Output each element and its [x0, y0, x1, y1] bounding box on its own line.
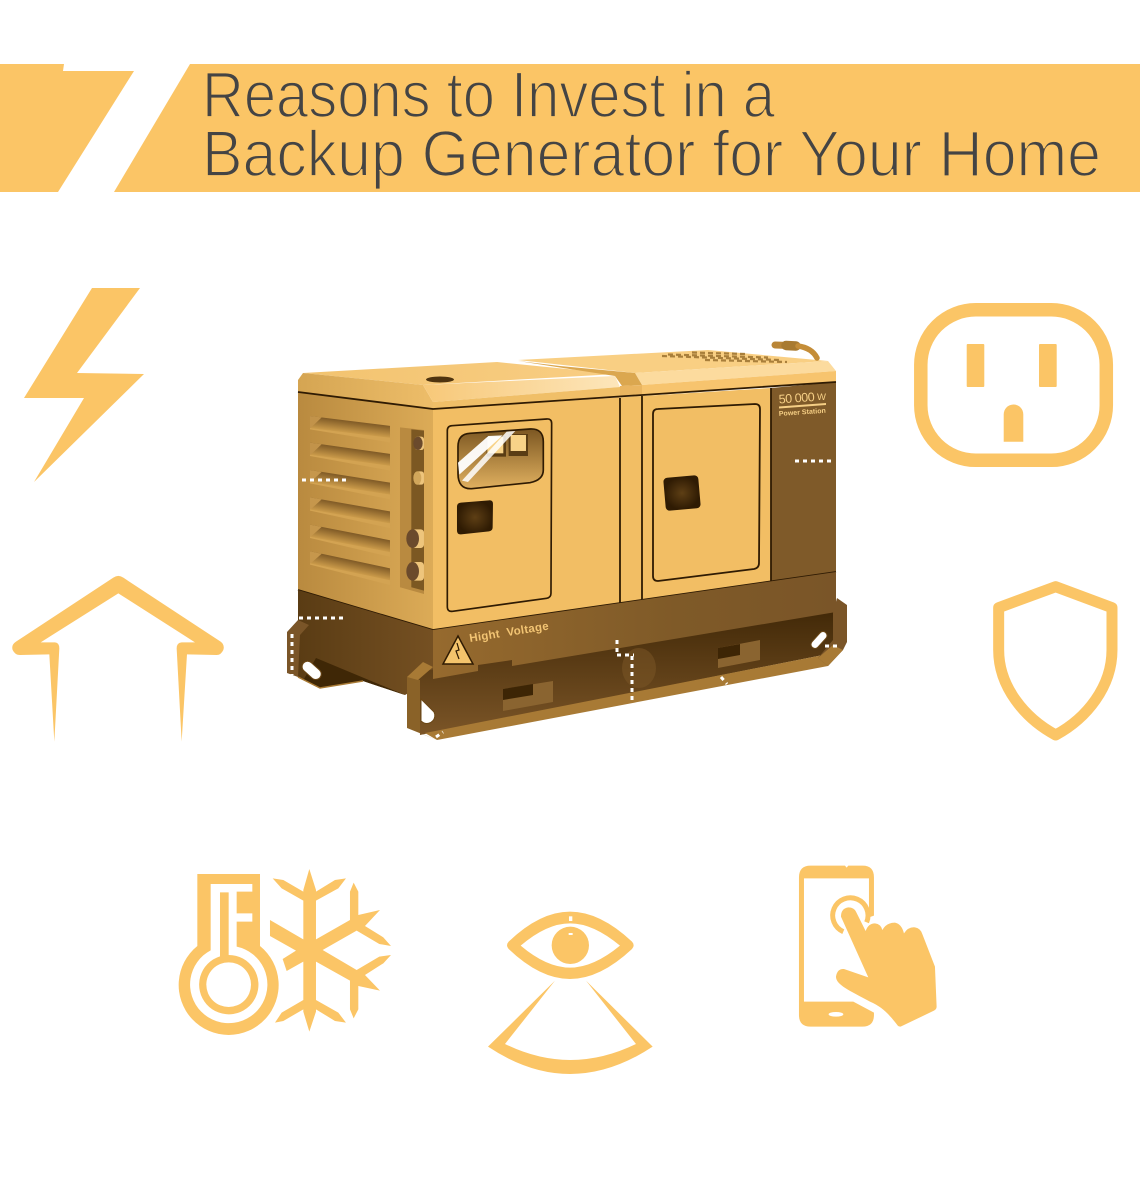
roof vent holes: [662, 352, 787, 362]
banner left slash: [0, 64, 134, 192]
generator roof: [298, 350, 836, 409]
title banner: [0, 58, 1140, 192]
warning triangle: [443, 636, 473, 664]
mounting holes: [300, 630, 829, 724]
end panel labels: Power Station: [779, 408, 826, 418]
skid beam: [425, 655, 828, 740]
high voltage label: Hight Voltage: [469, 621, 549, 645]
touch ring: [833, 898, 868, 932]
panel outlines: [298, 382, 836, 630]
dotted white seams: [292, 461, 838, 737]
window gauges: [487, 436, 506, 457]
door screen: [457, 500, 493, 534]
generator illustration: [287, 345, 847, 740]
phone: [799, 866, 874, 1027]
thermometer: [179, 874, 279, 1035]
end panel labels: W: [817, 392, 826, 403]
icon: lightning bolt: [24, 288, 144, 482]
hand: [836, 907, 937, 1027]
control window: [458, 429, 543, 489]
generator dark end panel: [771, 382, 836, 581]
exhaust pipe: [775, 345, 817, 358]
generator front panel: [433, 388, 771, 630]
title text: Backup Generator for Your Home: [202, 117, 1101, 190]
window glare: [458, 431, 515, 482]
title text: [202, 58, 1101, 190]
banner main strip: [114, 64, 1140, 192]
right door: [653, 404, 760, 581]
icon: house: [12, 576, 224, 742]
louvers: [310, 416, 552, 611]
left bracket: [287, 620, 363, 688]
title text: Reasons to Invest in a: [202, 58, 776, 131]
recess slots: [503, 640, 760, 711]
right bracket: [818, 598, 847, 666]
side connector column: [400, 427, 424, 594]
icon: hand tapping smartphone: [799, 866, 937, 1027]
end panel labels: 50 000: [778, 390, 815, 406]
icon: shield: [999, 587, 1112, 735]
right door screen: [663, 475, 701, 511]
base left shadow: [304, 658, 405, 695]
generator base left: [298, 590, 433, 695]
icon: power outlet: [921, 310, 1106, 460]
end panel labels: [778, 390, 826, 418]
snowflake: [270, 869, 391, 1032]
generator left side panel: [298, 392, 433, 630]
generator recess: [418, 600, 836, 735]
generator base front strip: [433, 572, 836, 679]
front bracket: [407, 662, 437, 740]
field of view cone: [488, 981, 653, 1074]
control door: [447, 419, 552, 611]
icon: thermometer and snowflake: [179, 869, 391, 1035]
icon: eye with field of view: [488, 912, 653, 1074]
